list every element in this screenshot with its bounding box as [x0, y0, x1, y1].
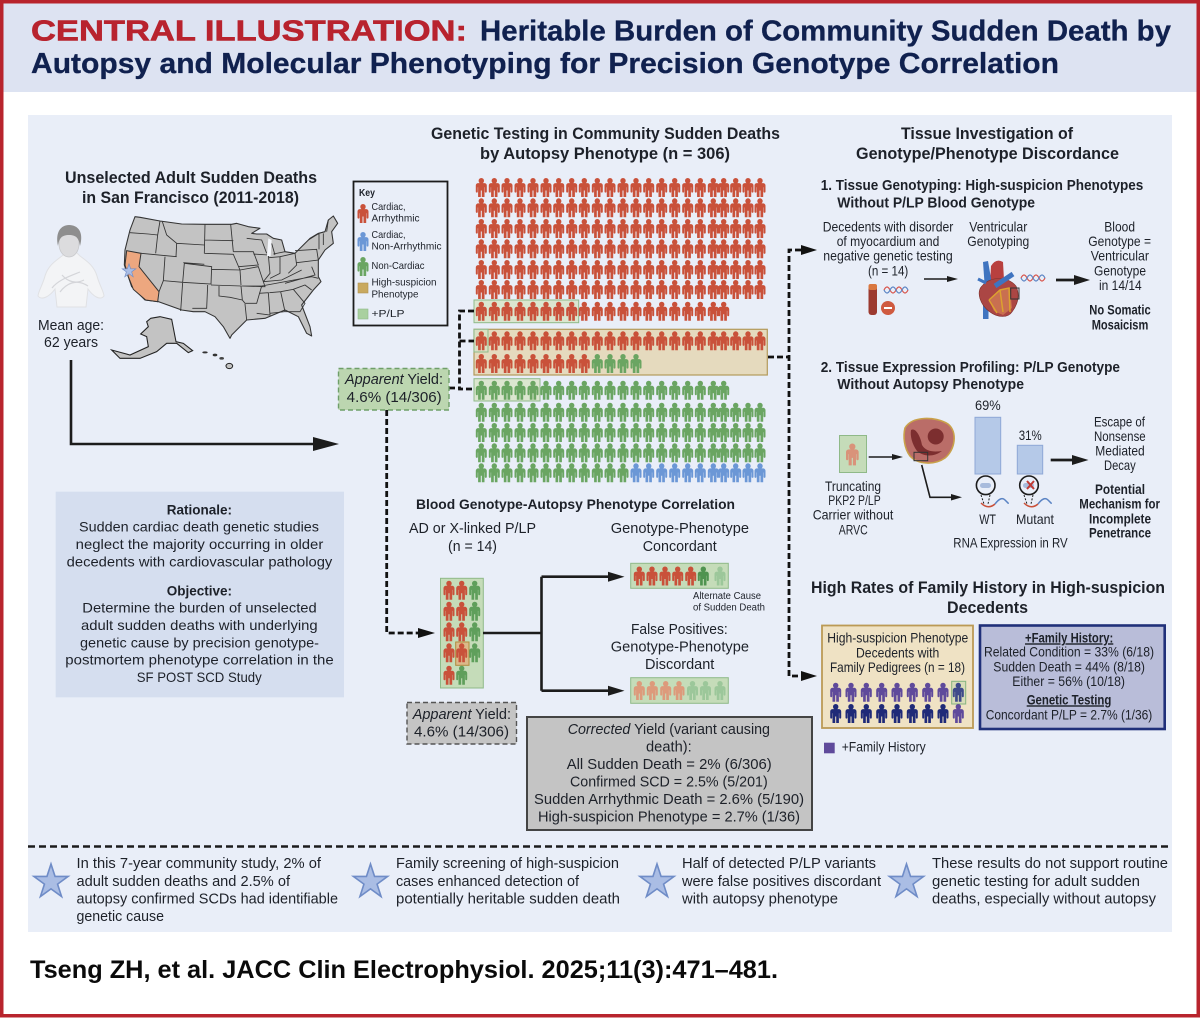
text: mechanism: Nonsense — [1094, 428, 1146, 444]
panel: family history results: Sudden Death = 44% (8/18) — [993, 658, 1145, 674]
callout: corrected yield: death): — [646, 739, 692, 756]
green rows: non-cardiac — [476, 354, 766, 482]
rationale and objective: decedents with cardiovascular pathology — [67, 553, 332, 569]
panel: family pedigrees — [822, 626, 973, 728]
rationale and objective: Rationale: — [167, 501, 232, 517]
heading: unselected deaths — [65, 168, 317, 207]
panel: family history results: Concordant P/LP = 2.7% (1/36) — [986, 706, 1152, 722]
subheading: tissue genotyping: 1. Tissue Genotyping: High-suspicion Phenotypes — [821, 177, 1143, 194]
text: blood equals ventricular: Blood — [1104, 219, 1135, 235]
takeaway 2: Family screening of high-suspicion — [396, 855, 619, 872]
icon: blood tube with negative result — [868, 284, 908, 315]
mean age: 62 years — [44, 334, 98, 351]
panel: family history results: Genetic Testing — [1027, 691, 1111, 707]
text: mechanism — [1079, 414, 1160, 541]
panel: family history results: Either = 56% (10/18) — [1012, 673, 1125, 689]
icon: star on San Francisco — [122, 264, 136, 277]
text: blood equals ventricular: No Somatic — [1089, 302, 1151, 318]
label: AD or X-linked — [409, 520, 536, 555]
arrow: carrier to slice — [869, 454, 903, 460]
icon: WT RNA — [976, 476, 1008, 507]
main panel — [28, 115, 1172, 932]
takeaway 4: genetic testing for adult sudden — [932, 873, 1140, 890]
callout: corrected yield: Confirmed SCD = 2.5% (5/201) — [570, 774, 768, 791]
rationale and objective: genetic cause by precision genotype- — [80, 634, 319, 650]
takeaway 3: with autopsy phenotype — [681, 890, 838, 908]
mean age — [38, 317, 104, 351]
takeaway 4: deaths, especially without autopsy — [932, 890, 1156, 908]
label: concordant — [611, 520, 749, 555]
text: mechanism: Decay — [1104, 457, 1136, 473]
key: Arrhythmic — [372, 212, 420, 224]
icon: heart cross-section — [904, 418, 954, 463]
icon: PKP2 carrier — [840, 436, 866, 472]
key: Phenotype — [372, 288, 419, 300]
note: alternate cause — [693, 591, 765, 614]
callout: apparent yield: 4.6% (14/306) — [347, 389, 442, 406]
heading: tissue investigation: Tissue Investigation of — [901, 124, 1073, 143]
callout: apparent yield repeated — [407, 702, 516, 744]
red rows: cardiac arrhythmic — [476, 178, 766, 373]
subheading: tissue genotyping: Without P/LP Blood Genotype — [837, 194, 1035, 211]
bar chart: RNA expression: 31% — [1019, 427, 1042, 443]
text: ventricular genotyping: Genotyping — [967, 233, 1029, 249]
rationale and objective — [56, 492, 344, 697]
key — [354, 182, 448, 326]
key: Non-Cardiac — [372, 260, 424, 272]
heading: unselected deaths: in San Francisco (2011-2018) — [82, 188, 299, 207]
text: mechanism: Mechanism for — [1079, 495, 1160, 511]
highlight: high-suspicion phenotype — [474, 329, 767, 375]
pictogram: 14 P/LP carriers — [440, 578, 483, 688]
takeaway 4 — [889, 855, 1168, 908]
text: blood equals ventricular: Genotype = — [1088, 233, 1151, 249]
key: Non-Arrhythmic — [372, 240, 442, 252]
label: false positives: Genotype-Phenotype — [611, 639, 749, 656]
label: AD or X-linked: AD or X-linked P/LP — [409, 520, 536, 537]
subheading: tissue expression: Without Autopsy Phenotype — [837, 376, 1024, 393]
header band — [3, 3, 1197, 92]
text: mechanism: Potential — [1095, 481, 1145, 497]
callout: apparent yield repeated: Apparent Yield: — [412, 706, 511, 723]
heading: family history — [811, 578, 1165, 617]
label: false positives: Discordant — [645, 656, 715, 673]
takeaway 2 — [353, 855, 620, 908]
legend: family history: +Family History — [842, 739, 926, 755]
text: mechanism: Mediated — [1095, 443, 1145, 459]
icon: mutant RNA — [1020, 476, 1051, 507]
text: blood equals ventricular — [1088, 219, 1151, 332]
callout: apparent yield: Apparent Yield: — [344, 371, 443, 388]
arrow: cohort to testing — [71, 360, 339, 451]
takeaway 4: These results do not support routine — [932, 855, 1168, 872]
label: false positives: False Positives: — [631, 621, 728, 638]
labels: RNA expression: Mutant — [1016, 511, 1054, 527]
heading: genetic testing: by Autopsy Phenotype (n = 306) — [480, 144, 730, 163]
text: mechanism: Escape of — [1094, 414, 1145, 430]
pictogram: 306 decedents by autopsy phenotype — [474, 178, 767, 482]
key: High-suspicion — [372, 276, 437, 288]
takeaway 3: Half of detected P/LP variants — [682, 855, 876, 872]
text: blood equals ventricular: in 14/14 — [1099, 277, 1142, 293]
callout: corrected yield: High-suspicion Phenotype = 2.7% (1/36) — [538, 809, 800, 826]
key: Key — [359, 187, 375, 199]
takeaway 3 — [640, 855, 882, 908]
key: Cardiac, — [372, 201, 406, 213]
heading: unselected deaths: Unselected Adult Sudden Deaths — [65, 168, 317, 187]
text: blood equals ventricular: Genotype — [1094, 262, 1146, 278]
label: AD or X-linked: (n = 14) — [448, 538, 497, 555]
map: United States — [112, 216, 338, 369]
heading: blood genotype correlation: Blood Genotype-Autopsy Phenotype Correlation — [416, 496, 735, 512]
icon: heart — [978, 261, 1019, 319]
text: mechanism: Incomplete — [1089, 510, 1151, 526]
takeaway 1: In this 7-year community study, 2% of — [76, 855, 322, 872]
text: carrier: Truncating — [825, 478, 881, 494]
panel: family history results: Related Condition = 33% (6/18) — [984, 644, 1154, 660]
bar chart: RNA expression: 69% — [975, 397, 1001, 413]
text: carrier: ARVC — [839, 521, 868, 537]
takeaway 1: genetic cause — [76, 908, 164, 925]
rationale and objective: Determine the burden of unselected — [82, 600, 317, 616]
title: Heritable Burden of Community Sudden Death by — [480, 16, 1171, 48]
label: concordant: Concordant — [643, 538, 717, 555]
rationale and objective: neglect the majority occurring in older — [76, 536, 324, 552]
heading: genetic testing: Genetic Testing in Community Sudden Deaths — [431, 124, 780, 143]
text: decedents: of myocardium and — [837, 233, 939, 249]
panel: family pedigrees: High-suspicion Phenotype — [827, 630, 968, 646]
key: +P/LP — [372, 308, 404, 320]
highlight: +P/LP arrhythmic — [474, 300, 579, 323]
callout: corrected yield: Corrected Yield (variant causing — [568, 721, 770, 738]
icon: DNA — [1021, 275, 1045, 281]
text: ventricular genotyping: Ventricular — [969, 219, 1028, 235]
heading: family history: Decedents — [947, 598, 1028, 617]
blue row: cardiac non-arrhythmic — [630, 463, 766, 482]
callout: corrected yield — [527, 717, 812, 830]
text: carrier: PKP2 P/LP — [828, 492, 881, 508]
note: alternate cause: Alternate Cause — [693, 591, 761, 602]
takeaway 1: autopsy confirmed SCDs had identifiable — [76, 890, 338, 908]
arrow: apparent yield to correlation — [387, 410, 435, 638]
arrow: to blood genotype result — [1056, 275, 1090, 285]
title: Autopsy and Molecular Phenotyping for Precision Genotype Correlation — [31, 48, 1059, 80]
callout: corrected yield: Sudden Arrhythmic Death = 2.6% (5/190) — [534, 791, 804, 808]
subheading: tissue genotyping — [821, 177, 1143, 211]
text: decedents — [823, 219, 954, 278]
label: false positives — [611, 621, 749, 673]
labels: RNA expression: WT — [979, 511, 996, 527]
rationale and objective: Objective: — [167, 583, 232, 599]
citation: Tseng ZH, et al. JACC Clin Electrophysiol. 2025;11(3):471–481. — [30, 956, 778, 984]
dashed connectors: +P/LP groups to apparent yield — [449, 311, 474, 389]
heading: family history: High Rates of Family History in High-suspicion — [811, 578, 1165, 597]
rationale and objective: Sudden cardiac death genetic studies — [79, 519, 319, 535]
label: concordant: Genotype-Phenotype — [611, 520, 749, 537]
text: carrier — [813, 478, 893, 537]
highlight: +P/LP high-suspicion — [474, 329, 488, 352]
dashed connector: high-suspicion to tissue and family panels — [768, 245, 817, 681]
rationale and objective: postmortem phenotype correlation in the — [65, 652, 334, 668]
bar chart: RNA expression — [975, 397, 1043, 474]
arrow: to escape of decay — [1051, 455, 1088, 465]
text: blood equals ventricular: Mosaicism — [1092, 316, 1148, 332]
takeaway 2: cases enhanced detection of — [396, 873, 580, 890]
callout: corrected yield: All Sudden Death = 2% (6/306) — [567, 756, 772, 773]
heading: genetic testing — [431, 124, 780, 163]
text: decedents: (n = 14) — [868, 262, 908, 278]
panel: family history results: +Family History: — [1025, 629, 1113, 645]
title: CENTRAL ILLUSTRATION: — [31, 16, 467, 48]
mean age: Mean age: — [38, 317, 104, 334]
panel: family pedigrees: Family Pedigrees (n = 18) — [830, 659, 965, 675]
arrows: carriers to concordant and discordant — [483, 572, 624, 696]
panel: family pedigrees: Decedents with — [856, 644, 939, 660]
callout: apparent yield — [338, 368, 449, 410]
arrow: slice to RNA — [922, 465, 962, 500]
text: mechanism: Penetrance — [1089, 525, 1151, 541]
subheading: tissue expression — [821, 359, 1120, 393]
takeaway 2: potentially heritable sudden death — [396, 890, 620, 908]
arrow: to ventricular genotyping — [924, 276, 958, 282]
labels: RNA expression — [953, 511, 1068, 550]
text: decedents: negative genetic testing — [823, 248, 953, 264]
pictogram: concordant — [631, 563, 728, 588]
heading: tissue investigation: Genotype/Phenotype Discordance — [856, 144, 1119, 163]
key: Cardiac, — [372, 229, 406, 241]
callout: apparent yield repeated: 4.6% (14/306) — [414, 724, 509, 741]
rationale and objective: adult sudden deaths with underlying — [81, 617, 318, 633]
text: blood equals ventricular: Ventricular — [1091, 248, 1149, 264]
highlight: +P/LP non-cardiac — [474, 379, 540, 401]
takeaway 1 — [34, 855, 338, 925]
subheading: tissue expression: 2. Tissue Expression Profiling: P/LP Genotype — [821, 359, 1120, 376]
pictogram: discordant — [631, 678, 728, 703]
panel: family history results — [980, 626, 1165, 729]
text: carrier: Carrier without — [813, 507, 893, 523]
text: ventricular genotyping — [967, 219, 1029, 249]
rationale and objective: SF POST SCD Study — [137, 669, 262, 685]
note: alternate cause: of Sudden Death — [693, 603, 765, 614]
takeaway 3: were false positives discordant — [681, 873, 882, 890]
takeaway 1: adult sudden deaths and 2.5% of — [76, 873, 291, 890]
heading: tissue investigation — [856, 124, 1119, 163]
title — [31, 16, 1171, 80]
icon: man with hands on chest — [38, 225, 104, 307]
text: decedents: Decedents with disorder — [823, 219, 954, 235]
labels: RNA expression: RNA Expression in RV — [953, 534, 1068, 550]
